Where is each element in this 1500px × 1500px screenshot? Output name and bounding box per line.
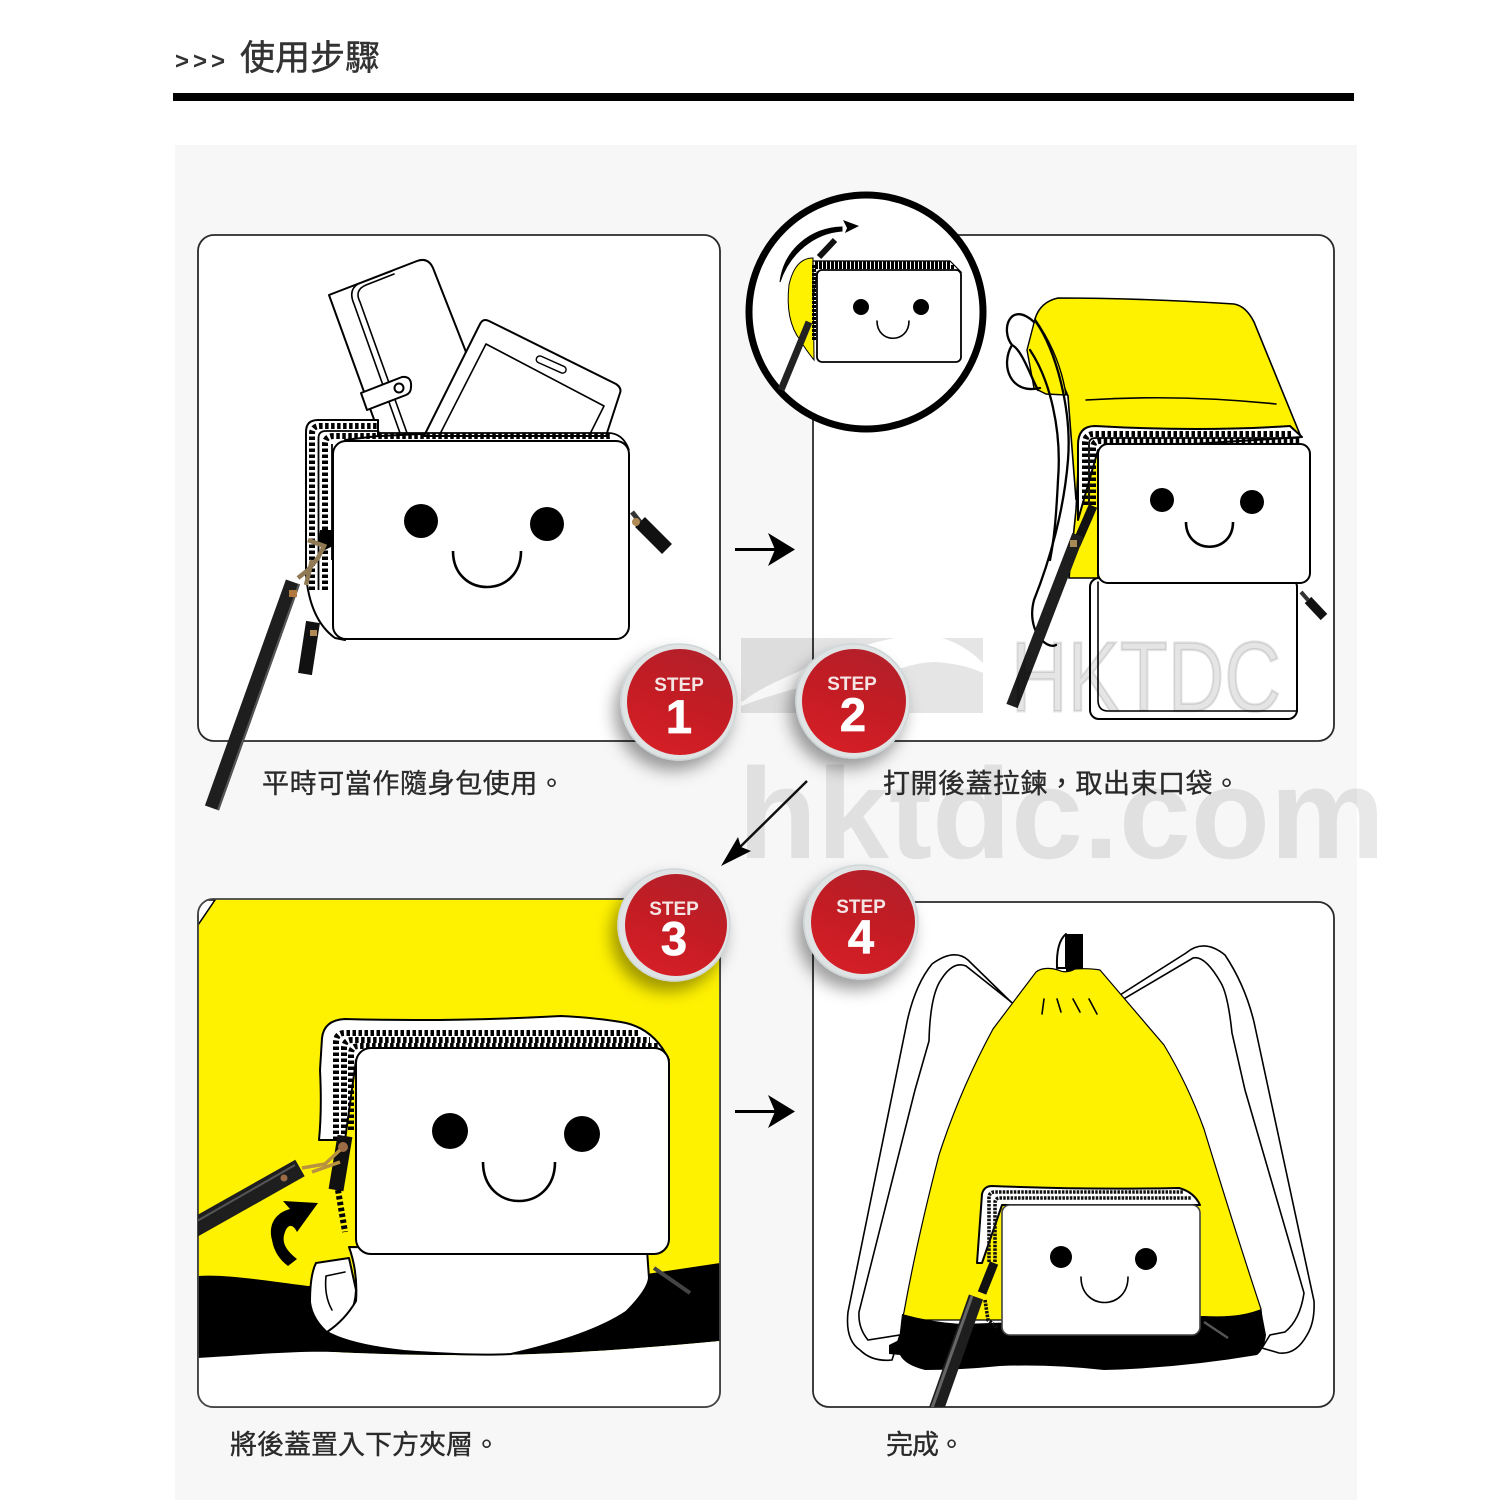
- handle loop: [1057, 934, 1083, 972]
- lower pouch: [327, 1247, 649, 1355]
- zipper pull lower: [305, 622, 317, 674]
- lens: [749, 195, 983, 429]
- bag front face: [333, 441, 629, 639]
- watermark hktdc.com: hktdc.com: [738, 742, 1385, 886]
- mini face: [853, 299, 929, 338]
- watermark: [738, 621, 1385, 886]
- bag front face: [1098, 444, 1310, 583]
- back fabric: [319, 1016, 669, 1140]
- badge: step 3: [618, 869, 730, 981]
- badge: step 2: STEP: [827, 674, 877, 695]
- wrist strap: [212, 582, 299, 810]
- eyes and smile: [1050, 1246, 1157, 1302]
- panel 4 frame: [813, 902, 1334, 1407]
- watermark logo: [741, 638, 983, 713]
- gold clip: [298, 540, 324, 585]
- lower pocket: [1090, 578, 1297, 719]
- eyes and smile: [1150, 488, 1264, 547]
- zipper pull right: [632, 512, 667, 549]
- drawstring cords: [1007, 314, 1069, 646]
- back fabric: [977, 1186, 1200, 1263]
- gather wrinkles: [1042, 999, 1097, 1014]
- zipper and strap: [1012, 506, 1093, 706]
- zipper knot: [318, 530, 333, 550]
- badge: step 4: [804, 865, 918, 979]
- header: [173, 39, 1354, 101]
- yellow drawstring fabric: [1035, 298, 1301, 578]
- panel outline: [198, 899, 720, 1407]
- header rule: [173, 93, 1354, 101]
- header chevrons: >>>: [175, 48, 225, 75]
- bag back: [1078, 426, 1302, 520]
- yellow flap left: [1027, 319, 1066, 395]
- yellow body: [902, 968, 1262, 1320]
- organiser book: [329, 260, 466, 436]
- page background panel: [175, 145, 1357, 1500]
- illustration: step 1 bag with book and tablet: [212, 260, 667, 810]
- eyes and smile: [432, 1113, 600, 1201]
- illustration: step 4 drawstring backpack: [848, 934, 1314, 1410]
- tablet: [424, 320, 620, 436]
- arrow: step 3 to 4: [735, 1095, 795, 1128]
- wrist strap: [932, 1296, 976, 1410]
- badge: step 3: 3: [661, 912, 687, 965]
- caption: step 3: 將後蓋置入下方夾層。: [230, 1430, 500, 1460]
- arrow: step 2 to 3: [721, 781, 807, 866]
- zippers: [985, 1192, 1192, 1328]
- badge: step 2: [796, 644, 910, 758]
- illustration: step 3 folding the flap: [190, 899, 720, 1407]
- panel: step 1 frame: [198, 235, 720, 741]
- panel 3 frame: [198, 900, 720, 1407]
- badge: step 3: STEP: [649, 899, 699, 920]
- badge: step 1: STEP: [654, 675, 704, 696]
- arrow: step 1 to 2: [735, 533, 795, 566]
- folded handle flap: [310, 1258, 356, 1335]
- eyes and smile: [404, 504, 564, 587]
- badge: step 1: 1: [666, 690, 692, 743]
- mini bag zipper: [813, 261, 961, 300]
- header title: 使用步驟: [240, 39, 380, 78]
- gold clip: [302, 1150, 340, 1172]
- curved motion arrow: [780, 220, 859, 282]
- dark pull right: [1204, 1322, 1228, 1338]
- mini bag body: [817, 270, 961, 362]
- badge: step 4: 4: [848, 910, 874, 963]
- yellow fabric peek: [788, 258, 814, 360]
- mini zipper pull: [819, 240, 835, 257]
- caption: step 1: 平時可當作隨身包使用。: [262, 769, 565, 799]
- dark zipper pull right: [654, 1268, 690, 1293]
- panel 2 frame: [813, 235, 1334, 741]
- illustration: step 2 open bag with yellow drawstring bag: [1007, 298, 1324, 719]
- black base: [889, 1309, 1266, 1370]
- detail callout circle: [749, 195, 983, 429]
- badge: step 1: [621, 644, 737, 760]
- watermark HKTDC: HKTDC: [1011, 621, 1281, 732]
- zipper pull and lower teeth: [336, 1136, 348, 1232]
- bag front face: [1002, 1205, 1200, 1335]
- bag back and zippers: [306, 420, 629, 640]
- wrist strap: [190, 1165, 300, 1230]
- zipper pull: [982, 1263, 994, 1293]
- mini strap: [781, 322, 809, 390]
- zipper pull right: [1301, 592, 1324, 617]
- caption: step 2: 打開後蓋拉鍊，取出束口袋。: [883, 769, 1240, 799]
- shoulder straps: [848, 946, 1314, 1360]
- yellow and black background: [198, 899, 720, 1407]
- mini zipper teeth: [814, 263, 954, 340]
- zippers: [1085, 434, 1300, 505]
- fabric crease: [1086, 398, 1276, 404]
- badge: step 4: STEP: [836, 897, 886, 918]
- caption: step 4: 完成。: [886, 1430, 965, 1460]
- zippers: [336, 1033, 658, 1140]
- badge: step 2: 2: [840, 688, 866, 741]
- curved arrow: [271, 1201, 318, 1266]
- bag front face: [356, 1048, 669, 1254]
